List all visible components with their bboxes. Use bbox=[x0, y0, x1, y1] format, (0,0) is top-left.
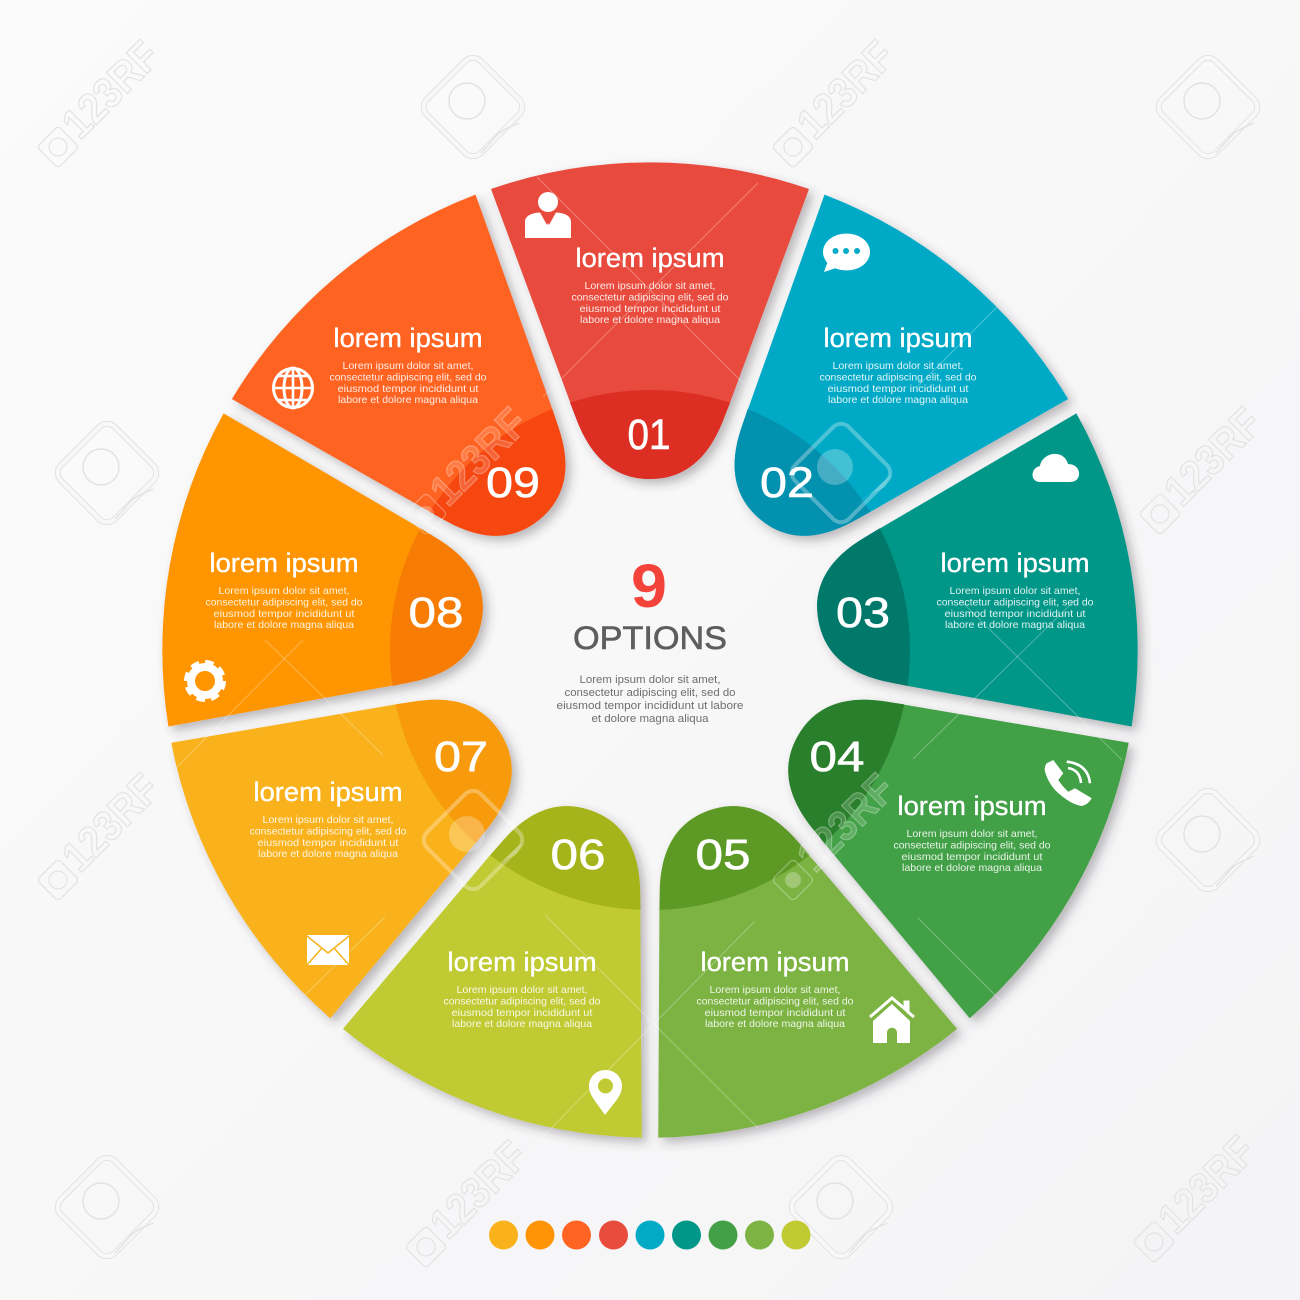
text block 01: labore et dolore magna aliqua bbox=[580, 314, 720, 326]
icon: phone bbox=[1045, 760, 1092, 806]
segment shape 08 bbox=[142, 409, 509, 777]
segment shape 02 bbox=[638, 174, 1085, 621]
panel: segment 08 bbox=[142, 409, 509, 777]
text block 05 bbox=[696, 947, 854, 1030]
icon: map pin bbox=[589, 1070, 622, 1115]
text block 08: eiusmod tempor incididunt ut bbox=[214, 608, 355, 620]
text block 04 bbox=[894, 791, 1051, 874]
text block 04: consectetur adipiscing elit, sed do bbox=[894, 840, 1051, 852]
number 03: 03 bbox=[836, 589, 890, 637]
icon: cloud bbox=[1032, 454, 1079, 482]
text block 06 bbox=[444, 947, 601, 1030]
panel: segment 04 bbox=[719, 598, 1152, 1032]
panel: segment 06 bbox=[334, 756, 741, 1163]
center heading: OPTIONS: OPTIONS bbox=[573, 620, 727, 656]
watermarks over chart bbox=[177, 177, 1122, 1160]
text block 08: labore et dolore magna aliqua bbox=[214, 619, 354, 631]
center text block: eiusmod tempor incididunt ut labore bbox=[556, 700, 744, 712]
text block 06: lorem ipsum bbox=[448, 947, 596, 977]
text block 02: consectetur adipiscing elit, sed do bbox=[820, 372, 977, 384]
icon: person bbox=[525, 192, 571, 238]
icon: envelope bbox=[307, 935, 349, 965]
center text block: Lorem ipsum dolor sit amet, bbox=[580, 674, 720, 686]
text block 05: labore et dolore magna aliqua bbox=[705, 1018, 845, 1030]
text block 03: labore et dolore magna aliqua bbox=[945, 619, 1085, 631]
panel: segment 05 bbox=[559, 756, 966, 1163]
center heading: 9: 9 bbox=[631, 552, 667, 620]
panel: segment 03 bbox=[791, 409, 1158, 777]
number 05: 05 bbox=[696, 831, 750, 879]
text block 05: lorem ipsum bbox=[700, 947, 850, 977]
number 07: 07 bbox=[434, 733, 488, 781]
text block 02: Lorem ipsum dolor sit amet, bbox=[832, 360, 964, 372]
text block 09: consectetur adipiscing elit, sed do bbox=[330, 372, 487, 384]
text block 01: lorem ipsum bbox=[576, 243, 724, 273]
segment shape 05 bbox=[559, 756, 966, 1163]
panel: segment 01 bbox=[491, 162, 809, 479]
segment shape 06 bbox=[334, 756, 741, 1163]
text block 02: eiusmod tempor incididunt ut bbox=[828, 383, 969, 395]
text block 03: consectetur adipiscing elit, sed do bbox=[936, 596, 1094, 608]
panel: segment 07 bbox=[148, 598, 581, 1032]
text block 03: eiusmod tempor incididunt ut bbox=[944, 608, 1086, 620]
text block 02 bbox=[820, 323, 977, 406]
text block 05: eiusmod tempor incididunt ut bbox=[704, 1007, 846, 1019]
segment shape 04 bbox=[719, 598, 1152, 1032]
icon: home bbox=[870, 998, 914, 1043]
text block 08: consectetur adipiscing elit, sed do bbox=[206, 596, 363, 608]
text block 09: Lorem ipsum dolor sit amet, bbox=[342, 360, 474, 372]
colour legend dots bbox=[489, 1220, 810, 1250]
text block 07: lorem ipsum bbox=[254, 777, 402, 807]
text block 04: eiusmod tempor incididunt ut bbox=[902, 851, 1043, 863]
number 08: 08 bbox=[408, 589, 464, 637]
panel: segment 09 bbox=[215, 174, 662, 621]
text block 07 bbox=[250, 777, 407, 860]
number tab 07 bbox=[385, 666, 542, 849]
segment shape 03 bbox=[791, 409, 1158, 777]
text block 07: consectetur adipiscing elit, sed do bbox=[250, 826, 407, 838]
text block 06: eiusmod tempor incididunt ut bbox=[452, 1007, 593, 1019]
number tab 02 bbox=[699, 399, 878, 570]
text block 09: eiusmod tempor incididunt ut bbox=[338, 383, 479, 395]
text block 05: consectetur adipiscing elit, sed do bbox=[696, 996, 854, 1008]
text block 08: lorem ipsum bbox=[210, 548, 358, 578]
number tab 01 bbox=[570, 390, 730, 479]
text block 07: eiusmod tempor incididunt ut bbox=[258, 837, 399, 849]
watermarks behind chart: 123RF bbox=[1149, 1127, 1265, 1243]
watermarks behind chart: 123RF bbox=[421, 1132, 537, 1248]
text block 07: Lorem ipsum dolor sit amet, bbox=[262, 814, 394, 826]
text block 05: Lorem ipsum dolor sit amet, bbox=[710, 984, 840, 996]
watermarks behind chart: 123RF bbox=[53, 765, 169, 881]
text block 04: lorem ipsum bbox=[898, 791, 1046, 821]
watermarks over chart: 123RF bbox=[788, 765, 904, 881]
number tab 06 bbox=[486, 783, 667, 922]
text block 08: Lorem ipsum dolor sit amet, bbox=[218, 585, 350, 597]
text block 01: Lorem ipsum dolor sit amet, bbox=[584, 280, 716, 292]
text block 08 bbox=[206, 548, 363, 631]
text block 03: Lorem ipsum dolor sit amet, bbox=[950, 585, 1080, 597]
text block 07: labore et dolore magna aliqua bbox=[258, 848, 398, 860]
number tab 08 bbox=[380, 526, 495, 699]
number 04: 04 bbox=[810, 733, 864, 781]
segment shape 09 bbox=[215, 174, 662, 621]
icon: chat bubble bbox=[823, 234, 870, 272]
number tab 04 bbox=[758, 666, 915, 849]
number tab 03 bbox=[805, 526, 920, 699]
icon: gear bbox=[186, 662, 224, 700]
watermarks behind chart: 123RF bbox=[1155, 399, 1271, 515]
text block 09: labore et dolore magna aliqua bbox=[338, 394, 478, 406]
text block 06: labore et dolore magna aliqua bbox=[452, 1018, 592, 1030]
watermarks over chart: 123RF bbox=[421, 399, 537, 515]
segment shape 07 bbox=[148, 598, 581, 1032]
number 09: 09 bbox=[486, 459, 540, 507]
icon: globe bbox=[273, 368, 313, 408]
text block 09: lorem ipsum bbox=[334, 323, 482, 353]
text block 01: eiusmod tempor incididunt ut bbox=[580, 303, 721, 315]
number 01: 01 bbox=[628, 411, 670, 459]
watermarks behind chart: 123RF bbox=[788, 32, 904, 148]
text block 02: labore et dolore magna aliqua bbox=[828, 394, 968, 406]
watermarks behind chart: 123RF bbox=[53, 32, 169, 148]
watermarks behind chart: 123RF bbox=[421, 399, 537, 515]
text block 02: lorem ipsum bbox=[824, 323, 972, 353]
segment shape 01 bbox=[491, 162, 809, 479]
center text block: consectetur adipiscing elit, sed do bbox=[564, 687, 736, 699]
number 06: 06 bbox=[550, 831, 606, 879]
center text block: et dolore magna aliqua bbox=[592, 713, 709, 725]
text block 09 bbox=[330, 323, 487, 406]
number 02: 02 bbox=[760, 459, 814, 507]
text block 06: Lorem ipsum dolor sit amet, bbox=[456, 984, 588, 996]
text block 03: lorem ipsum bbox=[940, 548, 1090, 578]
text block 04: labore et dolore magna aliqua bbox=[902, 862, 1042, 874]
text block 04: Lorem ipsum dolor sit amet, bbox=[906, 828, 1038, 840]
text block 06: consectetur adipiscing elit, sed do bbox=[444, 996, 601, 1008]
center text block bbox=[556, 674, 744, 725]
text block 01 bbox=[572, 243, 729, 326]
number tab 05 bbox=[633, 783, 814, 922]
text block 03 bbox=[936, 548, 1094, 631]
text block 01: consectetur adipiscing elit, sed do bbox=[572, 292, 729, 304]
number tab 09 bbox=[422, 399, 601, 570]
panel: segment 02 bbox=[638, 174, 1085, 621]
